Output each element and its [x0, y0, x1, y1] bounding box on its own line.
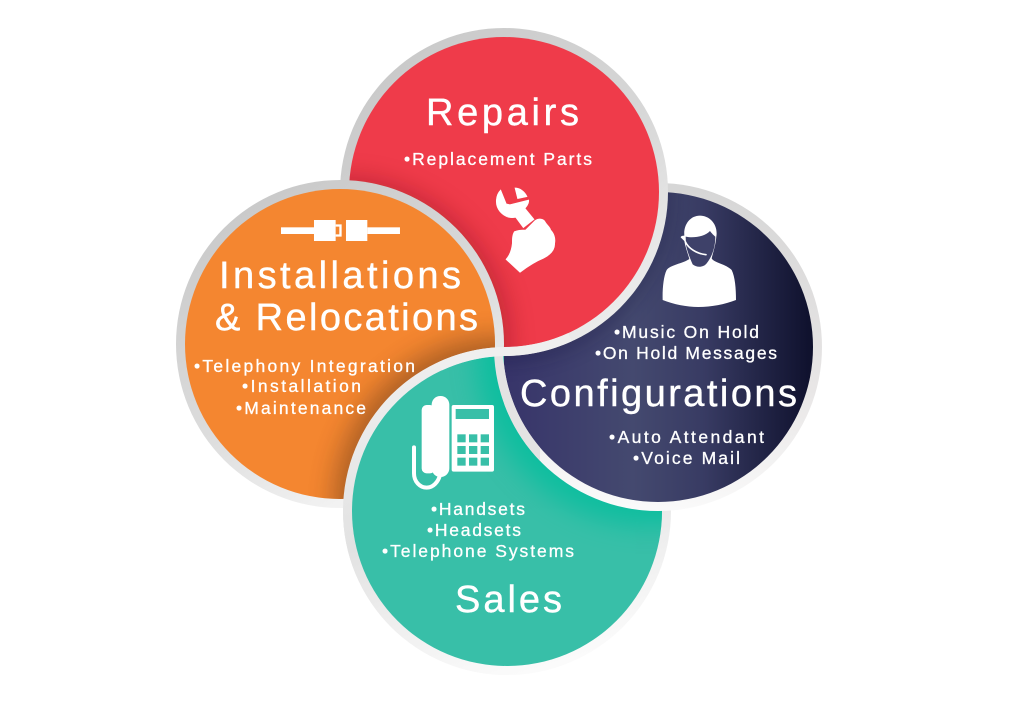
panel: sales circle overlap on installations: [343, 347, 504, 666]
icon: hand holding wrench: [496, 188, 555, 272]
panel: sales circle: [504, 404, 671, 666]
heading: Installations & Relocations: Installations: [219, 255, 461, 297]
list: sales items: •Telephone Systems: [382, 541, 574, 561]
panel: configurations circle: [504, 183, 822, 511]
infographic: four interlocking service circles: [176, 28, 822, 666]
list: configurations bottom items: [609, 427, 764, 468]
list: installations items: •Telephony Integration: [194, 356, 415, 376]
list: installations items: •Maintenance: [236, 398, 366, 418]
list: installations items: [194, 356, 415, 418]
heading: Installations & Relocations: & Relocations: [215, 297, 478, 339]
list: configurations top items: •Music On Hold: [614, 322, 759, 342]
list: configurations bottom items: •Voice Mail: [633, 448, 740, 468]
list: sales items: •Handsets: [431, 499, 525, 519]
ring: configurations left edge over sales: [494, 356, 540, 461]
panel: repairs circle: [340, 28, 668, 356]
list: configurations bottom items: •Auto Attendant: [609, 427, 764, 447]
heading: Installations & Relocations: [215, 255, 478, 339]
heading: Configurations: Configurations: [520, 373, 797, 415]
list: configurations top items: •On Hold Messages: [595, 343, 777, 363]
ring: central S curve: [440, 337, 570, 366]
list: installations items: •Installation: [242, 376, 361, 396]
panel: installations circle: [176, 180, 504, 508]
list: repairs items: •Replacement Parts: [404, 149, 592, 169]
list: sales items: •Headsets: [427, 520, 521, 540]
list: sales items: [382, 499, 574, 561]
heading: Sales: Sales: [455, 579, 562, 621]
icon: cable plug: [281, 220, 400, 241]
list: configurations top items: [595, 322, 777, 363]
heading: Repairs: Repairs: [426, 92, 579, 134]
icon: person with headset: [663, 216, 736, 307]
icon: desk telephone: [414, 396, 494, 488]
